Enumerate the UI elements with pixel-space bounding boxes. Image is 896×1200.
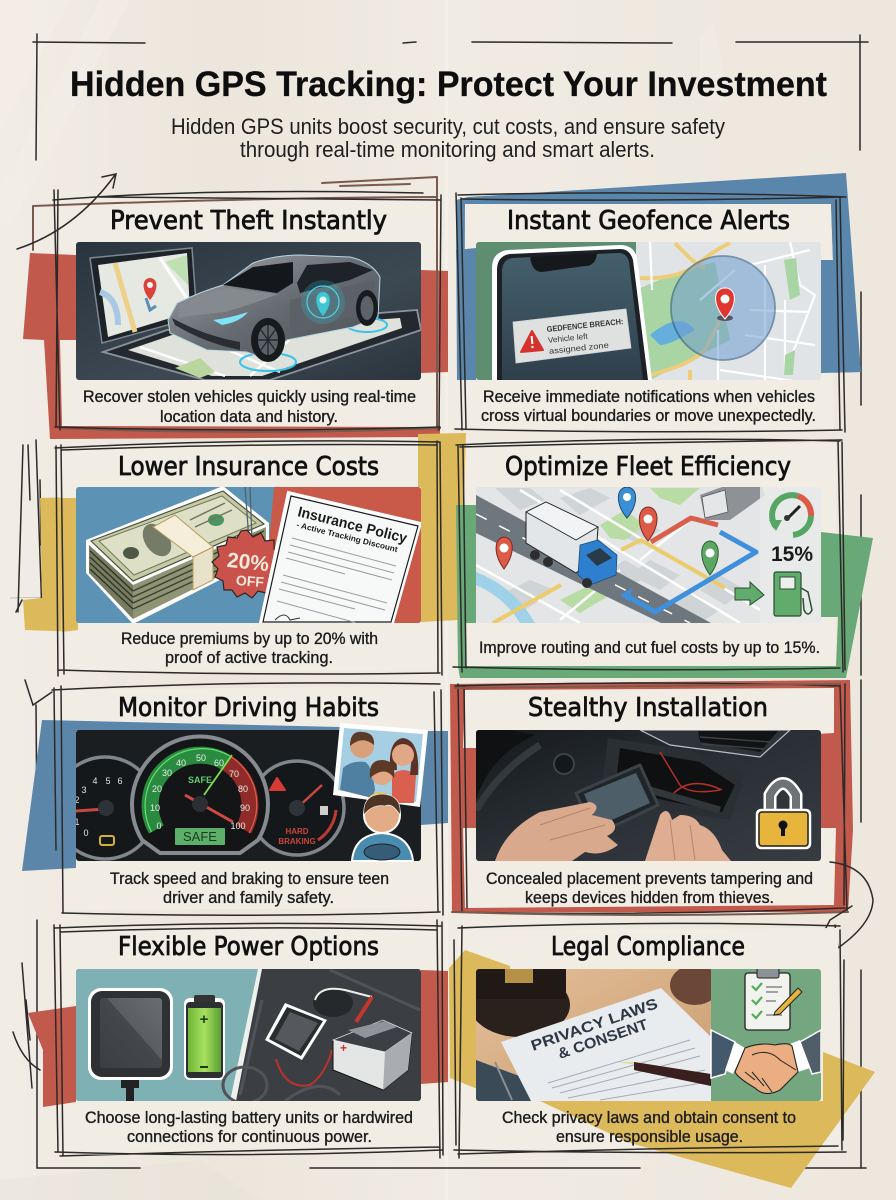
description: keeps devices hidden from thieves. xyxy=(525,889,774,907)
panel: insurance xyxy=(23,433,466,676)
panel: stealthy install xyxy=(450,680,873,955)
description: Improve routing and cut fuel costs by up to 15%. xyxy=(479,639,820,657)
description: Receive immediate notifications when vehicles xyxy=(483,388,815,406)
heading: geofence: Instant Geofence Alerts xyxy=(507,206,790,236)
heading: insurance: Lower Insurance Costs xyxy=(118,452,379,482)
sketched frame xyxy=(455,193,846,432)
illustration: dashboard and family: 4 xyxy=(92,776,98,786)
sketched frame xyxy=(25,680,443,915)
illustration: dashboard and family: 50 xyxy=(196,753,206,763)
illustration: phone and geofence map: Vehicle left xyxy=(547,332,589,345)
description: driver and family safety. xyxy=(163,889,334,907)
illustration: truck route map xyxy=(476,487,821,623)
description xyxy=(110,870,389,907)
description: Track speed and braking to ensure teen xyxy=(110,870,389,888)
panel: geofence alerts xyxy=(455,173,861,432)
illustration: phone and geofence map: assigned zone xyxy=(549,341,610,356)
panel: power options xyxy=(13,920,448,1158)
description: Recover stolen vehicles quickly using real-time xyxy=(83,388,416,406)
illustration: privacy document and handshake xyxy=(470,965,821,1101)
illustration: phone and geofence map: GEDFENCE BREACH: xyxy=(546,317,624,334)
illustration: dashboard and family: SAFE xyxy=(183,829,217,844)
illustration: battery and hardwired xyxy=(76,969,421,1103)
description xyxy=(83,388,416,426)
illustration: dashboard and family: 3 xyxy=(81,785,87,795)
subtitle xyxy=(171,114,725,162)
sketched frame xyxy=(55,441,442,676)
illustration: battery and hardwired: + xyxy=(340,1041,347,1055)
illustration: dashboard and family: 10 xyxy=(150,803,160,813)
panel: prevent theft xyxy=(17,174,448,439)
illustration: dashboard and family: 90 xyxy=(240,803,250,813)
illustration: installing device xyxy=(476,730,821,861)
panel: driving habits xyxy=(22,680,448,915)
sketched frame xyxy=(453,439,845,672)
description: ensure responsible usage. xyxy=(556,1128,743,1146)
sketched frame and arrow xyxy=(17,174,441,432)
illustration: dashboard and family: BRAKING xyxy=(278,837,316,846)
heading: fleet: Optimize Fleet Efficiency xyxy=(505,452,791,482)
description: Choose long-lasting battery units or hardwired xyxy=(85,1109,413,1127)
heading: legal: Legal Compliance xyxy=(551,932,745,962)
heading: power: Flexible Power Options xyxy=(118,932,379,962)
panel: legal compliance xyxy=(449,923,875,1188)
description: Check privacy laws and obtain consent to xyxy=(502,1109,796,1127)
description xyxy=(481,388,816,425)
illustration: dashboard and family: 6 xyxy=(117,776,123,786)
illustration: phone and geofence map xyxy=(476,242,821,385)
description xyxy=(502,1109,796,1146)
illustration: dashboard and family: 100 xyxy=(230,821,246,831)
illustration: dashboard and family xyxy=(54,723,428,861)
illustration: dashboard and family: 80 xyxy=(238,784,248,794)
heading: stealthy: Stealthy Installation xyxy=(528,693,768,723)
illustration: dashboard and family: HARD xyxy=(285,827,309,836)
subtitle: through real-time monitoring and smart alerts. xyxy=(240,137,655,162)
illustration: cash stack and policy: - Active Tracking Discount xyxy=(296,520,399,554)
illustration: dashboard and family: 20 xyxy=(152,784,162,794)
illustration: dashboard and family: 70 xyxy=(229,769,239,779)
description xyxy=(85,1109,413,1146)
description xyxy=(121,630,378,667)
description: Reduce premiums by up to 20% with xyxy=(121,630,378,648)
illustration: privacy document and handshake: & CONSENT xyxy=(556,1016,650,1063)
panel: fleet efficiency xyxy=(453,439,873,678)
description: Concealed placement prevents tampering and xyxy=(486,870,813,888)
description: proof of active tracking. xyxy=(165,649,333,667)
description: cross virtual boundaries or move unexpectedly. xyxy=(481,407,816,425)
illustration: dashboard and family: 0 xyxy=(83,828,89,838)
illustration: dashboard and family: 2 xyxy=(74,795,80,805)
description: connections for continuous power. xyxy=(127,1128,372,1146)
illustration: dashboard and family: SAFE xyxy=(188,775,212,785)
heading: monitor: Monitor Driving Habits xyxy=(118,693,379,723)
sketched frame xyxy=(454,923,846,1158)
sketched frame and scribble xyxy=(13,920,443,1158)
subtitle: Hidden GPS units boost security, cut costs, and ensure safety xyxy=(171,114,725,139)
illustration: dashboard and family: 0 xyxy=(156,821,162,831)
heading: prevent theft: Prevent Theft Instantly xyxy=(110,206,387,236)
illustration: dashboard and family: 5 xyxy=(105,776,111,786)
illustration: dashboard and family: 1 xyxy=(74,817,80,827)
description: location data and history. xyxy=(160,408,338,426)
illustration: privacy document and handshake: PRIVACY LAWS xyxy=(529,995,660,1055)
illustration: battery and hardwired: + xyxy=(200,1011,209,1028)
illustration: cash stack and policy: 20% xyxy=(226,549,270,576)
sketched frame and curve arrow xyxy=(452,683,873,955)
illustration: car on tablet map xyxy=(76,242,421,380)
illustration: cash stack and policy: Insurance Policy xyxy=(296,504,409,547)
illustration: dashboard and family: 40 xyxy=(176,758,186,768)
illustration: cash stack and policy: OFF xyxy=(235,572,265,590)
illustration: truck route map: 15% xyxy=(771,543,813,566)
description xyxy=(486,870,813,907)
illustration: dashboard and family: 30 xyxy=(162,768,172,778)
illustration: cash stack and policy xyxy=(76,486,421,628)
title: Hidden GPS Tracking: Protect Your Investment xyxy=(70,65,827,104)
illustration: dashboard and family: 60 xyxy=(214,758,224,768)
